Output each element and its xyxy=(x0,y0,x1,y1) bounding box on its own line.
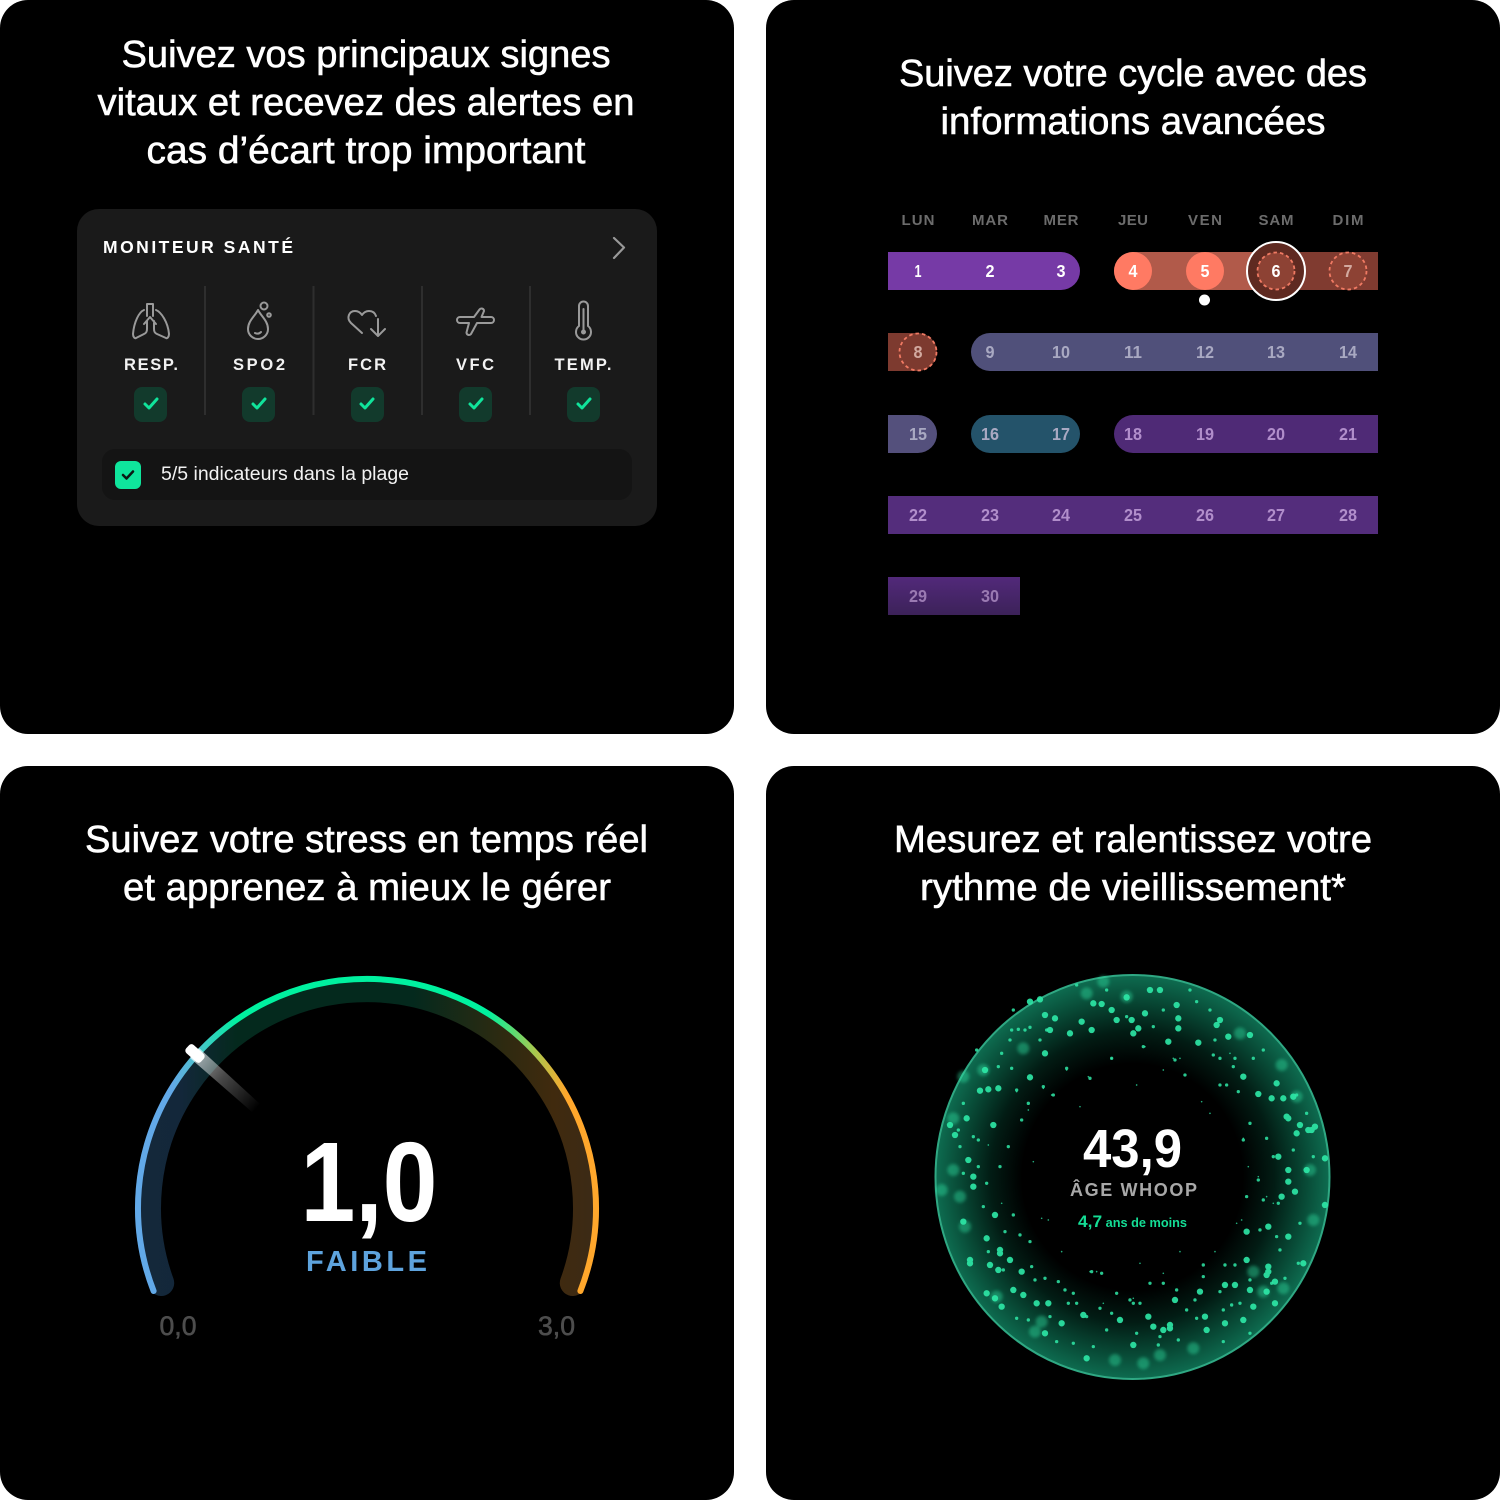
week 2: 14 xyxy=(1339,342,1357,362)
calendar xyxy=(888,212,1378,615)
whoop age delta: 4,7 ans de moins xyxy=(1078,1212,1187,1231)
status bar: 5/5 indicators xyxy=(102,449,632,500)
week 1: 4 xyxy=(1128,261,1138,281)
panel: health monitor xyxy=(0,0,734,734)
metric: temp xyxy=(554,302,612,422)
heading: vital signs: cas d’écart trop important xyxy=(146,130,586,172)
whoop age value: 43,9 xyxy=(1083,1119,1182,1179)
week 1: 1 xyxy=(914,261,922,281)
heading: cycle: informations avancées xyxy=(940,101,1326,143)
heading: vital signs: Suivez vos principaux signes xyxy=(122,34,610,76)
card title: MONITEUR SANTÉ xyxy=(103,236,293,257)
week 2: 8 xyxy=(914,342,923,362)
gauge marker xyxy=(184,1043,206,1064)
week 4: 27 xyxy=(1267,505,1285,525)
metric: resp xyxy=(124,304,178,422)
stress label: FAIBLE xyxy=(306,1246,427,1278)
week 4 xyxy=(888,496,1378,534)
week 1: 5 xyxy=(1200,261,1210,281)
metric: fcr xyxy=(348,311,386,422)
heading: vital signs xyxy=(98,34,634,172)
panel: whoop age xyxy=(766,766,1500,1500)
metric: vfc: VFC xyxy=(456,356,494,374)
week 3: 17 xyxy=(1052,424,1070,444)
heading: ageing: rythme de vieillissement* xyxy=(920,867,1346,909)
week 2: 13 xyxy=(1267,342,1285,362)
weekday labels: VEN xyxy=(1188,212,1222,229)
week 2 xyxy=(888,333,1378,371)
weekday labels: SAM xyxy=(1258,212,1294,229)
gauge needle trail xyxy=(190,1048,260,1112)
scale max: 3,0 xyxy=(538,1311,575,1341)
week 3: 16 xyxy=(981,424,999,444)
heading: stress xyxy=(85,819,648,909)
heading: cycle xyxy=(899,53,1367,143)
week 4: 22 xyxy=(909,505,927,525)
week 4: 26 xyxy=(1196,505,1214,525)
week 4: 28 xyxy=(1339,505,1357,525)
metric: spo2 xyxy=(233,302,285,422)
week 3: 18 xyxy=(1124,424,1142,444)
week 3: 20 xyxy=(1267,424,1285,444)
week 2: 12 xyxy=(1196,342,1214,362)
status bar: 5/5 indicators: 5/5 indicateurs dans la plage xyxy=(161,464,409,485)
week 4: 25 xyxy=(1124,505,1142,525)
week 3: 19 xyxy=(1196,424,1214,444)
week 4: 24 xyxy=(1052,505,1070,525)
weekday labels: DIM xyxy=(1332,212,1364,229)
weekday labels: JEU xyxy=(1118,212,1148,229)
week 1: 2 xyxy=(986,261,995,281)
weekday labels: LUN xyxy=(902,212,934,229)
heading: cycle: Suivez votre cycle avec des xyxy=(899,53,1367,95)
heading: ageing: Mesurez et ralentissez votre xyxy=(894,819,1372,861)
metric: spo2: SPO2 xyxy=(233,356,285,374)
week 2: 11 xyxy=(1124,342,1142,362)
weekday labels xyxy=(902,212,1364,229)
week 2: 10 xyxy=(1052,342,1070,362)
gauge xyxy=(138,979,596,1341)
panel: cycle xyxy=(766,0,1500,734)
icon: chevron xyxy=(614,238,624,258)
week 5: 29 xyxy=(909,586,927,606)
week 2: 9 xyxy=(986,342,995,362)
week 1: 7 xyxy=(1344,261,1352,281)
metric: resp: RESP. xyxy=(124,356,178,374)
heading: stress: Suivez votre stress en temps réel xyxy=(85,819,648,861)
week 3 xyxy=(888,415,1378,453)
heading: stress: et apprenez à mieux le gérer xyxy=(123,867,611,909)
whoop age label: ÂGE WHOOP xyxy=(1070,1179,1197,1200)
week 3: 15 xyxy=(909,424,927,444)
week 5: 30 xyxy=(981,586,999,606)
metric: vfc xyxy=(456,308,494,422)
heading: vital signs: vitaux et recevez des alertes en xyxy=(98,82,634,124)
heading: ageing xyxy=(894,819,1372,909)
week 5 xyxy=(888,577,1020,615)
week 1: 3 xyxy=(1056,261,1066,281)
panel: stress xyxy=(0,766,734,1500)
weekday labels: MER xyxy=(1044,212,1079,229)
week 1: 6 xyxy=(1272,261,1281,281)
week 4: 23 xyxy=(981,505,999,525)
orb xyxy=(936,975,1330,1379)
stress value: 1,0 xyxy=(300,1119,438,1245)
weekday labels: MAR xyxy=(972,212,1008,229)
scale min: 0,0 xyxy=(160,1311,196,1341)
metric: fcr: FCR xyxy=(348,356,386,374)
week 3: 21 xyxy=(1339,424,1357,444)
card: moniteur santé xyxy=(77,209,657,526)
metric: temp: TEMP. xyxy=(554,356,612,374)
week 1 xyxy=(888,242,1378,306)
